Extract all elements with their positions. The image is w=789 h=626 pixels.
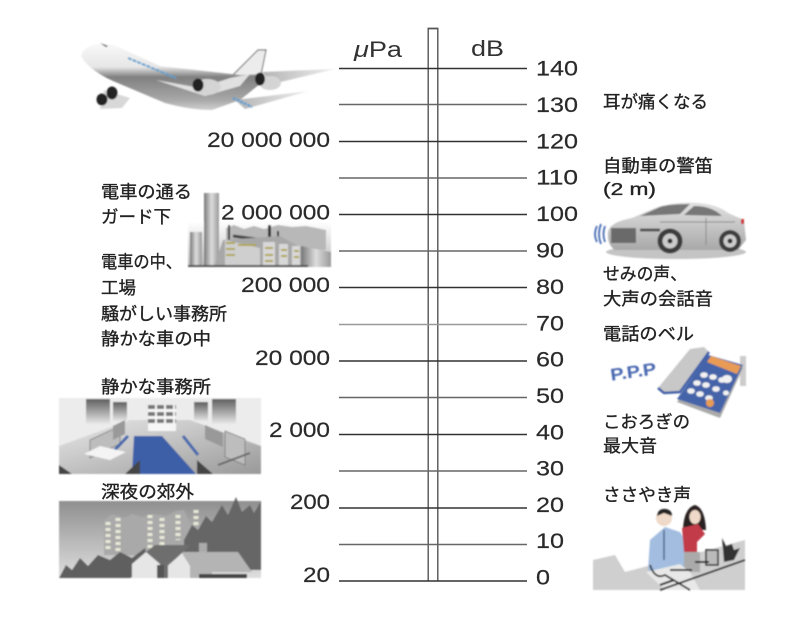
label group: right captions: 大声の会話音	[603, 289, 713, 309]
icon: suburb at night	[59, 497, 261, 578]
label group: left captions	[101, 182, 227, 502]
icon: two people whispering	[593, 505, 745, 590]
label group: left captions: 工場	[101, 278, 136, 298]
decibel values: 100	[536, 202, 578, 226]
label group: right captions: 電話のベル	[603, 324, 694, 344]
decibel values: 140	[536, 56, 578, 80]
decibel values: 50	[536, 384, 564, 408]
decibel values: 60	[536, 348, 564, 372]
label group: right captions: こおろぎの	[603, 412, 690, 432]
decibel values: 120	[536, 130, 578, 154]
label group: left captions: ガード下	[101, 207, 171, 227]
pressure values: 200 000	[241, 273, 330, 297]
decibel values: 0	[536, 566, 550, 590]
pressure values: 2 000 000	[221, 200, 330, 224]
pressure values: 200	[290, 490, 330, 514]
tick lines	[339, 68, 527, 581]
icon: quiet office	[59, 398, 261, 474]
label group: left captions: 電車の中、	[101, 252, 182, 272]
decibel values: 20	[536, 493, 564, 517]
pressure values	[207, 128, 330, 587]
label group: left captions: 騒がしい事務所	[101, 304, 227, 324]
decibel values: 40	[536, 420, 564, 444]
icon: factory and buildings	[188, 193, 331, 267]
decibel values	[536, 56, 578, 590]
icon: car with horn	[595, 203, 746, 259]
decibel values: 30	[536, 456, 564, 480]
label group: right captions: (2 m)	[603, 179, 656, 199]
pressure values: 20 000 000	[207, 128, 330, 152]
decibel values: 130	[536, 93, 578, 117]
label group: left captions: 電車の通る	[101, 182, 192, 202]
label group: left captions: 静かな車の中	[101, 329, 211, 349]
icon: airplane	[81, 43, 335, 110]
label group: right captions: 自動車の警笛	[603, 156, 713, 176]
pressure values: 20	[303, 563, 330, 587]
scale chart	[207, 28, 578, 590]
unit label: decibel: dB	[471, 36, 504, 61]
pressure values: 20 000	[255, 346, 330, 370]
scale column	[428, 28, 438, 581]
decibel values: 80	[536, 275, 564, 299]
decibel values: 110	[536, 166, 578, 190]
label group: left captions: 静かな事務所	[101, 377, 211, 397]
unit label: micro pascal: μPa	[353, 37, 403, 62]
pressure values: 2 000	[269, 418, 330, 442]
decibel values: 70	[536, 312, 564, 336]
label group: right captions: ささやき声	[603, 485, 691, 505]
decibel values: 10	[536, 529, 564, 553]
icon: telephone	[609, 347, 746, 418]
label group: left captions: 深夜の郊外	[101, 482, 195, 502]
label group: right captions: せみの声、	[603, 264, 687, 284]
decibel values: 90	[536, 238, 564, 262]
label group: right captions	[603, 92, 713, 505]
label group: right captions: 耳が痛くなる	[603, 92, 708, 112]
label group: right captions: 最大音	[603, 436, 657, 456]
icon: telephone: P.P.P	[609, 359, 657, 385]
